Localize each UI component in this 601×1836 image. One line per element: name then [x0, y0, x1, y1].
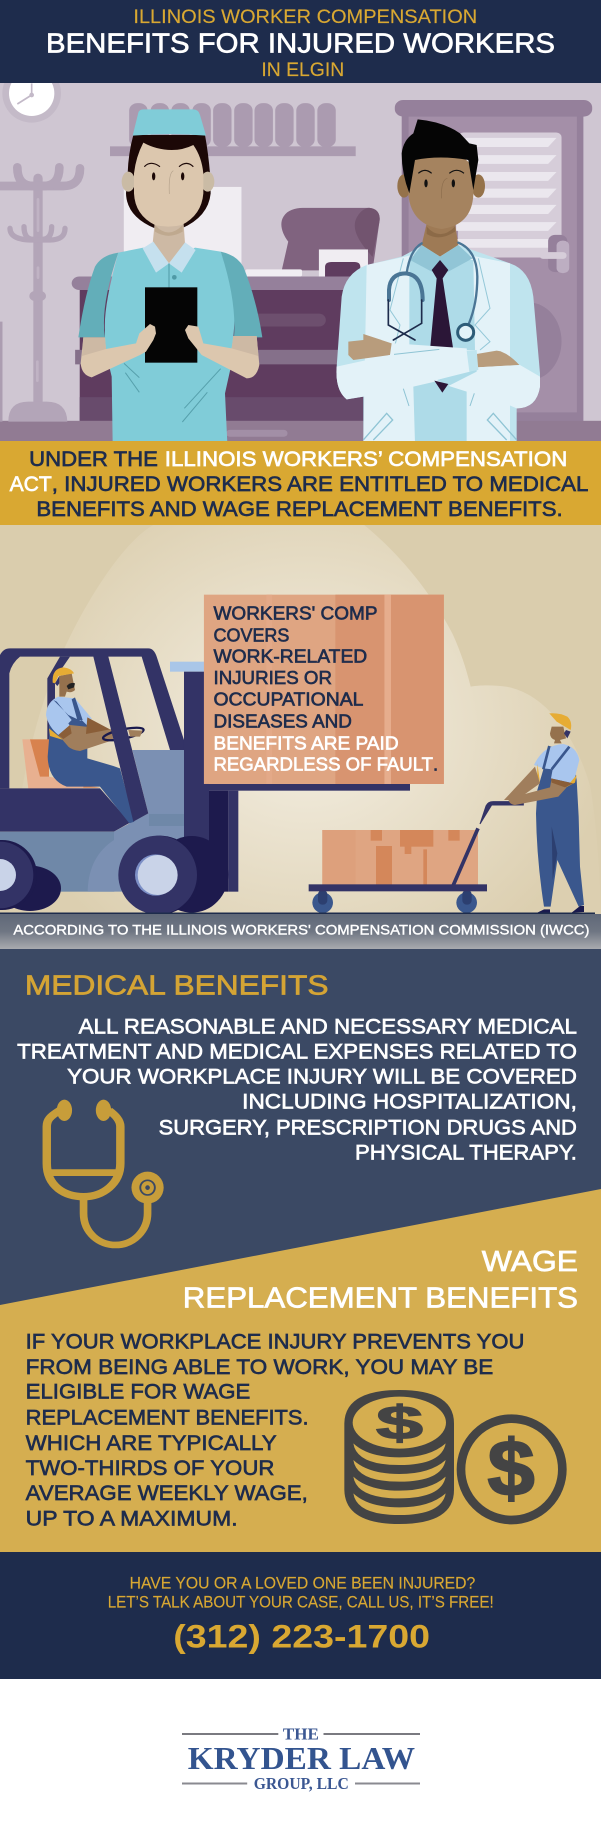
medical body text: INCLUDING HOSPITALIZATION, — [242, 1090, 577, 1113]
panel: wage replacement benefits — [0, 1189, 601, 1553]
worker pushing cart — [480, 713, 584, 913]
forklift text: OCCUPATIONAL — [214, 689, 363, 710]
icon: coins — [344, 1390, 562, 1524]
forklift text — [214, 602, 438, 775]
medical body text: SURGERY, PRESCRIPTION DRUGS AND — [159, 1116, 577, 1139]
icon: coins: $ — [488, 1423, 535, 1512]
gold statement banner: , INJURED WORKERS ARE ENTITLED TO MEDICAL — [52, 473, 588, 496]
floor — [0, 421, 601, 443]
source band — [0, 914, 601, 949]
icon: coins: $ — [376, 1396, 423, 1449]
wage body text: REPLACEMENT BENEFITS. — [26, 1407, 309, 1430]
medical body text: YOUR WORKPLACE INJURY WILL BE COVERED — [67, 1065, 577, 1088]
title line 2: BENEFITS FOR INJURED WORKERS — [46, 27, 555, 58]
gold statement banner: ACT — [10, 473, 52, 496]
desk — [72, 249, 368, 422]
stethoscope worn by doctor — [388, 243, 477, 340]
panel: medical benefits — [0, 949, 601, 1329]
wage body text: WHICH ARE TYPICALLY — [26, 1432, 277, 1455]
medical body text: ALL REASONABLE AND NECESSARY MEDICAL — [79, 1015, 577, 1038]
cart with boxes — [309, 828, 487, 913]
medical body text: TREATMENT AND MEDICAL EXPENSES RELATED TO — [17, 1040, 577, 1063]
medical body text: PHYSICAL THERAPY. — [355, 1141, 577, 1164]
logo: the kryder law group — [182, 1724, 420, 1793]
forklift text: WORKERS' COMP — [214, 602, 378, 623]
forklift with driver — [0, 648, 410, 914]
wage body text: FROM BEING ABLE TO WORK, YOU MAY BE — [26, 1356, 493, 1379]
forklift text: . — [433, 754, 438, 775]
forklift text: DISEASES AND — [214, 710, 352, 731]
doctor figure — [336, 119, 540, 443]
gold statement banner: BENEFITS AND WAGE REPLACEMENT BENEFITS. — [36, 498, 563, 521]
wage body text: TWO-THIRDS OF YOUR — [26, 1457, 274, 1480]
call to action text: HAVE YOU OR A LOVED ONE BEEN INJURED? — [130, 1574, 475, 1593]
tablet — [145, 287, 197, 363]
desk chair — [281, 208, 380, 270]
wage body text: ELIGIBLE FOR WAGE — [26, 1381, 250, 1404]
gold statement banner: UNDER THE — [29, 448, 158, 471]
background dome — [10, 525, 601, 915]
wage body text: AVERAGE WEEKLY WAGE, — [26, 1482, 308, 1505]
title line 1: ILLINOIS WORKER COMPENSATION — [133, 6, 477, 28]
logo: the kryder law group: THE — [283, 1724, 319, 1743]
forklift text: REGARDLESS OF FAULT — [214, 754, 433, 775]
logo: the kryder law group: KRYDER LAW — [188, 1740, 415, 1776]
forklift frame — [0, 648, 184, 822]
title line 3: IN ELGIN — [261, 59, 344, 81]
clock and coat rack — [0, 64, 80, 422]
nurse figure — [78, 109, 262, 443]
shelf with binders — [110, 103, 356, 156]
medical body text — [17, 1015, 577, 1164]
coat rack — [0, 167, 80, 422]
gold statement banner: ILLINOIS WORKERS’ COMPENSATION — [165, 448, 567, 471]
forklift text: INJURIES OR — [214, 667, 332, 688]
panel: call to action footer — [0, 1552, 601, 1679]
heading: wage replacement benefits: REPLACEMENT BENEFITS — [183, 1282, 578, 1314]
panel: clinic background — [0, 81, 601, 443]
panel: warehouse background — [0, 525, 601, 915]
logo: the kryder law group: GROUP, LLC — [254, 1774, 349, 1793]
wage body text: UP TO A MAXIMUM. — [26, 1508, 238, 1531]
forklift text: COVERS — [214, 624, 289, 645]
call to action text: LET’S TALK ABOUT YOUR CASE, CALL US, IT’S FREE! — [108, 1592, 494, 1611]
wage body text — [26, 1330, 524, 1531]
source band: ACCORDING TO THE ILLINOIS WORKERS' COMPENSATION COMMISSION (IWCC) — [13, 922, 589, 938]
call to action text — [108, 1574, 494, 1611]
gold statement banner — [0, 441, 601, 525]
forklift text: BENEFITS ARE PAID — [214, 732, 399, 753]
forklift wheels — [0, 836, 228, 914]
door — [395, 100, 592, 422]
heading: medical benefits: MEDICAL BENEFITS — [25, 969, 329, 1000]
panel: cargo box — [204, 595, 444, 784]
header bar — [0, 0, 601, 83]
wage body text: IF YOUR WORKPLACE INJURY PREVENTS YOU — [26, 1330, 524, 1353]
forklift text: WORK-RELATED — [214, 646, 367, 667]
ground line — [0, 912, 595, 914]
icon: wall clock — [2, 64, 61, 123]
paper sheet behind nurse — [124, 187, 241, 271]
icon: stethoscope — [47, 1100, 164, 1245]
driver — [46, 667, 145, 823]
heading: wage replacement benefits — [183, 1246, 578, 1314]
phone number: (312) 223-1700 — [173, 1617, 430, 1654]
heading: wage replacement benefits: WAGE — [482, 1246, 578, 1278]
